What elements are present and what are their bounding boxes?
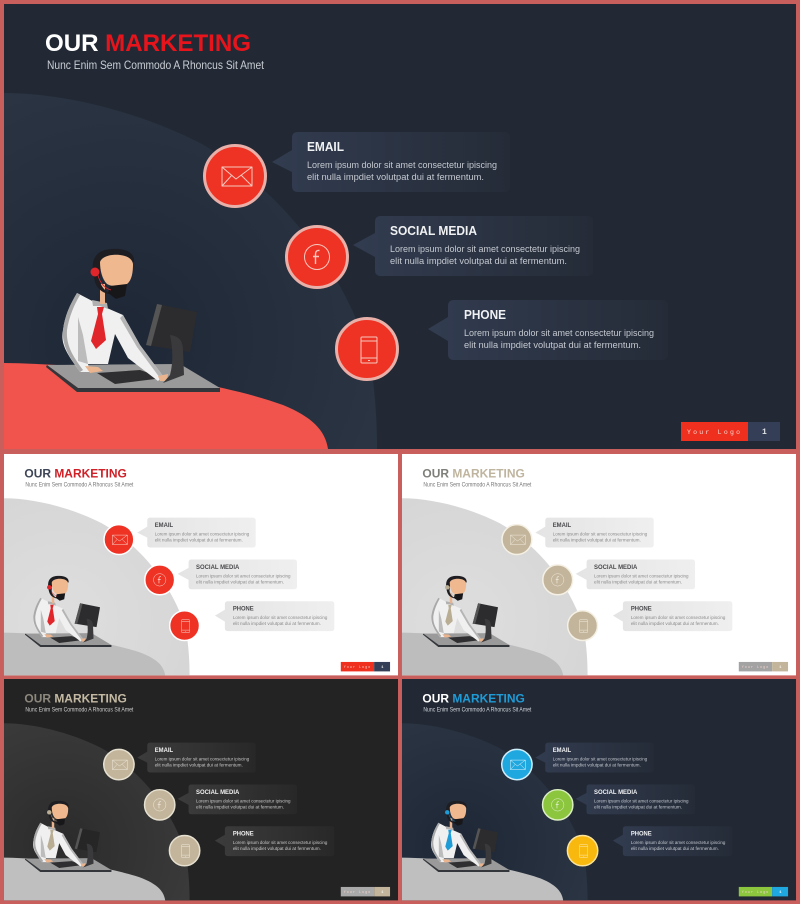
bubble: phone	[428, 300, 668, 360]
subtitle: Nunc Enim Sem Commodo A Rhoncus Sit Amet	[25, 707, 134, 713]
bubble: social media: Lorem ipsum dolor sit amet consectetur ipiscing	[594, 573, 689, 579]
bubble: social media: elit nulla impdiet volutpat dui at fermentum.	[390, 256, 567, 267]
illustration: agent	[25, 801, 111, 872]
bubble: email: EMAIL	[307, 139, 344, 154]
bubble: email: elit nulla impdiet volutpat dui at fermentum.	[155, 538, 243, 544]
bubble: email: elit nulla impdiet volutpat dui at fermentum.	[155, 763, 243, 769]
icon: email	[502, 749, 532, 780]
panel: main dark slide	[4, 4, 796, 449]
bubble: social media: Lorem ipsum dolor sit amet consectetur ipiscing	[196, 573, 291, 579]
panel: white red slide	[4, 454, 398, 675]
title: OUR MARKETING	[24, 466, 127, 480]
icon: email	[104, 525, 134, 554]
title: OUR MARKETING	[422, 691, 525, 705]
bubble: phone	[613, 826, 732, 856]
logo bar: Your Logo	[344, 890, 370, 894]
bubble: social media: Lorem ipsum dolor sit amet consectetur ipiscing	[196, 798, 291, 804]
icon: phone	[170, 611, 200, 641]
bubble: social media: elit nulla impdiet volutpat dui at fermentum.	[196, 579, 284, 585]
logo bar: 1	[381, 666, 384, 670]
panel: navy multicolor slide	[402, 679, 796, 900]
bubble: email: elit nulla impdiet volutpat dui at fermentum.	[553, 538, 641, 544]
bubble: social media: Lorem ipsum dolor sit amet consectetur ipiscing	[594, 798, 689, 804]
logo bar: Your Logo	[344, 665, 370, 669]
bubble: email: elit nulla impdiet volutpat dui at fermentum.	[307, 172, 484, 183]
bubble: phone: PHONE	[631, 606, 652, 613]
background curved shape	[4, 93, 377, 449]
bubble: phone: PHONE	[631, 831, 652, 838]
icon: email	[204, 146, 266, 206]
desk curved shape	[4, 363, 328, 449]
bubble: email: Lorem ipsum dolor sit amet consectetur ipiscing	[553, 532, 648, 538]
bubble: social media: SOCIAL MEDIA	[196, 564, 240, 571]
bubble: email: EMAIL	[553, 522, 571, 529]
title: OUR MARKETING	[422, 466, 525, 480]
bubble: social media: SOCIAL MEDIA	[390, 223, 478, 238]
icon: phone	[568, 611, 598, 641]
bubble: social media: SOCIAL MEDIA	[196, 789, 240, 796]
bubble: email: EMAIL	[155, 522, 173, 529]
bubble: email	[535, 743, 654, 773]
subtitle: Nunc Enim Sem Commodo A Rhoncus Sit Amet	[25, 482, 134, 488]
bubble: phone: PHONE	[464, 307, 506, 322]
logo bar	[739, 662, 788, 671]
bubble: social media: elit nulla impdiet volutpat dui at fermentum.	[196, 804, 284, 810]
bubble: phone: Lorem ipsum dolor sit amet consectetur ipiscing	[631, 615, 726, 621]
bubble: phone	[215, 601, 334, 631]
bubble: email	[137, 518, 256, 548]
logo bar: 1	[779, 666, 782, 670]
icon: facebook	[145, 565, 175, 595]
bubble: email: Lorem ipsum dolor sit amet consectetur ipiscing	[155, 532, 250, 538]
icon: phone	[169, 835, 200, 866]
bubble: social media: SOCIAL MEDIA	[594, 564, 638, 571]
bubble: social media	[576, 784, 695, 814]
icon: facebook	[145, 790, 175, 820]
icon: phone	[336, 318, 398, 380]
bubble: social media: elit nulla impdiet volutpat dui at fermentum.	[594, 804, 682, 810]
bubble: phone: Lorem ipsum dolor sit amet consectetur ipiscing	[631, 840, 726, 846]
subtitle: Nunc Enim Sem Commodo A Rhoncus Sit Amet	[423, 707, 532, 713]
bubble: email: Lorem ipsum dolor sit amet consectetur ipiscing	[307, 160, 497, 171]
logo bar	[681, 422, 780, 441]
bubble: phone: elit nulla impdiet volutpat dui at fermentum.	[464, 340, 641, 351]
bubble: email: EMAIL	[553, 747, 571, 754]
bubble: phone	[215, 826, 334, 856]
logo bar	[739, 887, 788, 896]
subtitle: Nunc Enim Sem Commodo A Rhoncus Sit Amet	[47, 58, 265, 72]
bubble: social media: elit nulla impdiet volutpat dui at fermentum.	[594, 579, 682, 585]
panel: black beige slide	[4, 679, 398, 900]
bubble: email	[272, 132, 510, 192]
title: OUR MARKETING	[45, 30, 251, 57]
subtitle: Nunc Enim Sem Commodo A Rhoncus Sit Amet	[423, 482, 532, 488]
bubble: social media	[353, 216, 593, 276]
bubble: phone	[613, 601, 732, 631]
icon: facebook	[543, 565, 573, 595]
bubble: email: Lorem ipsum dolor sit amet consectetur ipiscing	[553, 757, 648, 763]
logo bar: Your Logo	[687, 429, 740, 436]
illustration: agent	[423, 801, 509, 872]
bubble: phone: Lorem ipsum dolor sit amet consectetur ipiscing	[233, 840, 328, 846]
illustration: agent	[25, 576, 111, 647]
bubble: phone: elit nulla impdiet volutpat dui at fermentum.	[233, 846, 321, 852]
icon: facebook	[286, 226, 348, 288]
bubble: social media	[178, 559, 297, 589]
bubble: email: EMAIL	[155, 747, 173, 754]
title: OUR MARKETING	[24, 691, 127, 705]
bubble: social media: SOCIAL MEDIA	[594, 789, 638, 796]
logo bar: 1	[381, 891, 384, 895]
bubble: phone: Lorem ipsum dolor sit amet consectetur ipiscing	[464, 328, 654, 339]
bubble: phone: PHONE	[233, 606, 254, 613]
icon: phone	[567, 835, 598, 866]
icon: email	[502, 525, 532, 554]
icon: email	[104, 749, 134, 780]
bubble: email	[137, 743, 256, 773]
logo bar: 1	[762, 428, 767, 437]
icon: facebook	[543, 790, 573, 820]
bubble: email	[535, 518, 654, 548]
illustration: agent	[423, 576, 509, 647]
bubble: social media	[576, 559, 695, 589]
bubble: phone: elit nulla impdiet volutpat dui at fermentum.	[631, 846, 719, 852]
illustration: call center agent	[46, 249, 220, 392]
panel: white beige slide	[402, 454, 796, 675]
logo bar	[341, 887, 390, 896]
bubble: social media: Lorem ipsum dolor sit amet consectetur ipiscing	[390, 244, 580, 255]
bubble: phone: elit nulla impdiet volutpat dui at fermentum.	[233, 621, 321, 627]
bubble: phone: Lorem ipsum dolor sit amet consectetur ipiscing	[233, 615, 328, 621]
logo bar: Your Logo	[742, 665, 768, 669]
logo bar: Your Logo	[742, 890, 768, 894]
bubble: phone: elit nulla impdiet volutpat dui at fermentum.	[631, 621, 719, 627]
bubble: social media	[178, 784, 297, 814]
logo bar: 1	[779, 891, 782, 895]
bubble: email: Lorem ipsum dolor sit amet consectetur ipiscing	[155, 757, 250, 763]
logo bar	[341, 662, 390, 671]
bubble: phone: PHONE	[233, 831, 254, 838]
bubble: email: elit nulla impdiet volutpat dui at fermentum.	[553, 763, 641, 769]
